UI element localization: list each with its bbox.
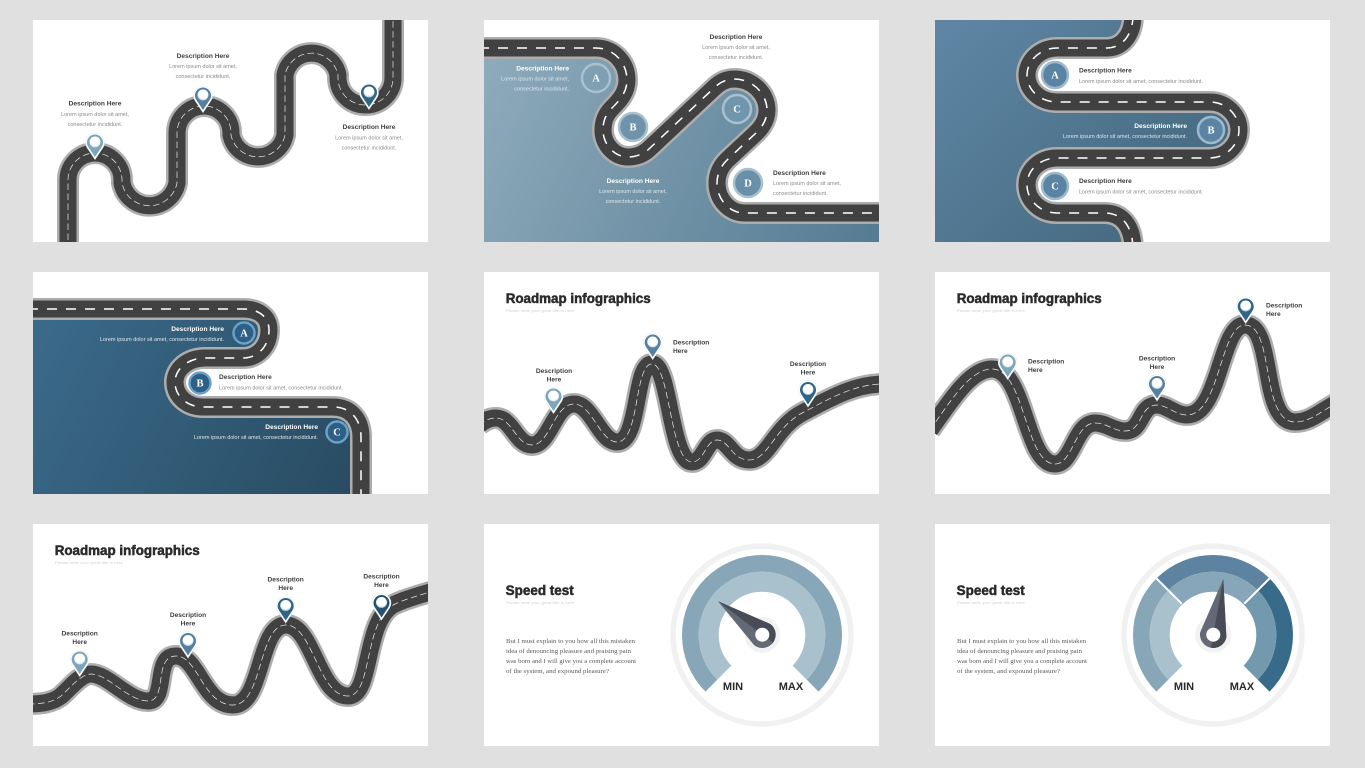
pin 3 xyxy=(799,381,817,407)
body text: idea of denouncing pleasure and praising pain xyxy=(957,648,1083,655)
label 4 xyxy=(363,574,400,589)
text block A: Description Here xyxy=(516,66,569,72)
text block D xyxy=(773,170,841,197)
label 3: Description xyxy=(790,361,826,368)
marker A: A xyxy=(240,328,248,340)
panel: serpentine road with A B C xyxy=(935,20,1330,242)
label MIN: MIN xyxy=(723,681,743,693)
heading: Speed test xyxy=(957,583,1025,598)
pin 3 xyxy=(360,83,378,110)
text block 1 xyxy=(61,100,129,128)
text block 2: Lorem ipsum dolor sit amet, xyxy=(169,64,237,70)
marker C: C xyxy=(333,428,341,438)
pin 1 xyxy=(998,353,1017,380)
heading xyxy=(55,543,200,565)
heading: Please write your great title is here xyxy=(506,600,575,605)
label 2 xyxy=(1139,356,1175,371)
marker A xyxy=(234,322,254,344)
text block D: Description Here xyxy=(773,170,826,177)
text block C: consectetur incididunt. xyxy=(709,55,764,61)
label 1 xyxy=(62,630,98,646)
road xyxy=(28,309,361,502)
label 1: Here xyxy=(72,639,87,646)
pin 1 xyxy=(86,133,104,160)
pin 4 xyxy=(372,594,391,620)
panel: speed test gauge mid xyxy=(935,524,1330,746)
body text xyxy=(957,638,1087,675)
text block B: Description Here xyxy=(607,178,660,185)
text block B: consectetur incididunt. xyxy=(606,199,661,205)
label 1 xyxy=(1028,358,1064,374)
label 2: Here xyxy=(181,620,196,628)
text block A xyxy=(501,66,569,92)
text block 3: Description Here xyxy=(343,124,396,131)
road xyxy=(68,12,393,250)
text block C: Description Here xyxy=(265,424,318,431)
label 2 xyxy=(673,340,709,355)
marker B: B xyxy=(196,378,204,390)
road xyxy=(479,364,884,462)
text block 1: consectetur incididunt. xyxy=(68,122,123,128)
needle xyxy=(718,601,776,648)
label 2: Description xyxy=(673,340,709,346)
text block D: Lorem ipsum dolor sit amet, xyxy=(773,181,841,187)
label 2: Description xyxy=(170,612,206,619)
heading xyxy=(957,291,1102,313)
heading: Please write your great title is here xyxy=(957,600,1026,605)
blue area xyxy=(935,20,1239,242)
marker D xyxy=(734,169,762,197)
text block B: Description Here xyxy=(1134,123,1187,130)
marker B: B xyxy=(1207,126,1215,136)
heading: Roadmap infographics xyxy=(957,291,1102,306)
marker D: D xyxy=(744,178,752,190)
road xyxy=(28,591,433,705)
pin 2 xyxy=(194,86,212,112)
pin 1 xyxy=(70,650,89,676)
panel: roadmap infographics 1 xyxy=(484,272,879,494)
gauge xyxy=(1124,546,1302,724)
body text: But I must explain to you how all this mistaken xyxy=(957,638,1087,645)
body text: of the system, and expound pleasure? xyxy=(957,668,1060,675)
text block B xyxy=(219,374,344,392)
heading: Please write your great title is here xyxy=(55,560,124,565)
text block C: Lorem ipsum dolor sit amet, consectetur incididunt. xyxy=(194,435,318,441)
heading: Please write your great title is here xyxy=(957,308,1026,313)
text block A: Lorem ipsum dolor sit amet, consectetur incididunt. xyxy=(100,337,224,343)
text block A xyxy=(100,326,224,343)
marker B: B xyxy=(629,122,637,134)
text block 1: Lorem ipsum dolor sit amet, xyxy=(61,112,129,118)
label 2: Here xyxy=(1150,364,1165,371)
road xyxy=(1027,15,1239,250)
label 1: Description xyxy=(536,368,572,375)
heading: Speed test xyxy=(506,583,574,598)
body text: was born and I will give you a complete account xyxy=(506,658,636,665)
pin 2 xyxy=(643,333,662,360)
label 1 xyxy=(536,368,572,384)
text block C: Lorem ipsum dolor sit amet, consectetur incididunt. xyxy=(1079,190,1204,196)
text block B: Lorem ipsum dolor sit amet, xyxy=(599,189,667,195)
text block 2: consectetur incididunt. xyxy=(176,74,231,80)
heading xyxy=(506,583,575,605)
heading xyxy=(957,583,1026,605)
label 3 xyxy=(268,576,304,592)
marker B xyxy=(190,372,210,394)
road xyxy=(930,325,1335,464)
marker C xyxy=(326,422,348,442)
body text: of the system, and expound pleasure? xyxy=(506,668,609,675)
marker A xyxy=(582,64,610,92)
text block 3: Lorem ipsum dolor sit amet, xyxy=(335,136,403,142)
text block A: Lorem ipsum dolor sit amet, xyxy=(501,76,569,82)
label 3 xyxy=(1266,302,1302,318)
label 2 xyxy=(170,612,206,628)
text block 2: Description Here xyxy=(177,53,230,60)
marker B xyxy=(619,113,647,141)
panel: roadmap infographics 3 xyxy=(33,524,428,746)
label 3: Description xyxy=(268,576,304,584)
heading: Roadmap infographics xyxy=(506,291,651,306)
heading: Roadmap infographics xyxy=(55,543,200,558)
text block 2 xyxy=(169,53,237,80)
panel: roadmap infographics 2 xyxy=(935,272,1330,494)
panel: winding road with three pins xyxy=(33,20,428,242)
marker C xyxy=(723,95,751,123)
body text xyxy=(506,638,636,675)
label 3: Description xyxy=(1266,302,1302,310)
panel: stepped road on dark blue xyxy=(33,272,428,494)
text block A: Lorem ipsum dolor sit amet, consectetur incididunt. xyxy=(1079,79,1204,85)
label 2: Here xyxy=(673,348,688,355)
marker B xyxy=(1198,117,1224,143)
panel: road with A B C D on light blue xyxy=(484,20,879,242)
label MAX: MAX xyxy=(779,681,804,693)
marker A: A xyxy=(1051,70,1059,82)
marker C xyxy=(1042,173,1068,199)
body text: idea of denouncing pleasure and praising pain xyxy=(506,648,632,655)
needle xyxy=(1200,579,1226,648)
label 1: Here xyxy=(1028,367,1043,374)
panel: speed test gauge low xyxy=(484,524,879,746)
pin 2 xyxy=(1148,375,1166,401)
text block C: Description Here xyxy=(1079,178,1132,185)
body text: But I must explain to you how all this mistaken xyxy=(506,638,636,645)
text block 3: consectetur incididunt. xyxy=(342,146,397,152)
label 1: Description xyxy=(62,630,98,638)
text block C: Lorem ipsum dolor sit amet, xyxy=(702,45,770,51)
marker A: A xyxy=(592,74,600,84)
text block A: Description Here xyxy=(171,326,224,333)
label MAX: MAX xyxy=(1230,681,1255,693)
blue area xyxy=(484,48,879,242)
label 3 xyxy=(790,361,826,376)
marker C: C xyxy=(1051,182,1059,192)
label 3: Here xyxy=(278,585,293,592)
label 2: Description xyxy=(1139,356,1175,362)
text block B xyxy=(599,178,667,205)
label 4: Here xyxy=(374,582,389,589)
body text: was born and I will give you a complete account xyxy=(957,658,1087,665)
label MIN: MIN xyxy=(1174,681,1194,693)
label 1: Description xyxy=(1028,358,1064,366)
text block A: consectetur incididunt. xyxy=(514,86,569,92)
text block 3 xyxy=(335,124,403,152)
label 3: Here xyxy=(1266,311,1281,318)
marker A xyxy=(1042,62,1068,88)
label 1: Here xyxy=(547,376,562,384)
pin 2 xyxy=(179,632,197,658)
text block B: Lorem ipsum dolor sit amet, consectetur incididunt. xyxy=(219,386,344,392)
text block C xyxy=(1079,178,1204,196)
pin 1 xyxy=(544,387,563,414)
heading xyxy=(506,291,651,313)
text block B: Lorem ipsum dolor sit amet, consectetur incididunt. xyxy=(1063,134,1187,140)
text block C xyxy=(702,34,770,61)
blue area xyxy=(33,309,361,494)
text block A xyxy=(1079,68,1204,85)
text block A: Description Here xyxy=(1079,68,1132,74)
text block D: consectetur incididunt. xyxy=(773,191,828,197)
label 3: Here xyxy=(801,370,816,376)
text block 1: Description Here xyxy=(69,100,122,108)
marker C: C xyxy=(733,104,741,116)
gauge xyxy=(673,546,851,724)
text block B xyxy=(1063,123,1187,140)
text block C xyxy=(194,424,318,441)
road xyxy=(479,48,884,213)
text block B: Description Here xyxy=(219,374,272,381)
pin 3 xyxy=(1236,297,1255,324)
label 4: Description xyxy=(363,574,400,580)
text block C: Description Here xyxy=(710,34,763,41)
pin 3 xyxy=(276,597,295,623)
heading: Please write your great title is here xyxy=(506,308,575,313)
